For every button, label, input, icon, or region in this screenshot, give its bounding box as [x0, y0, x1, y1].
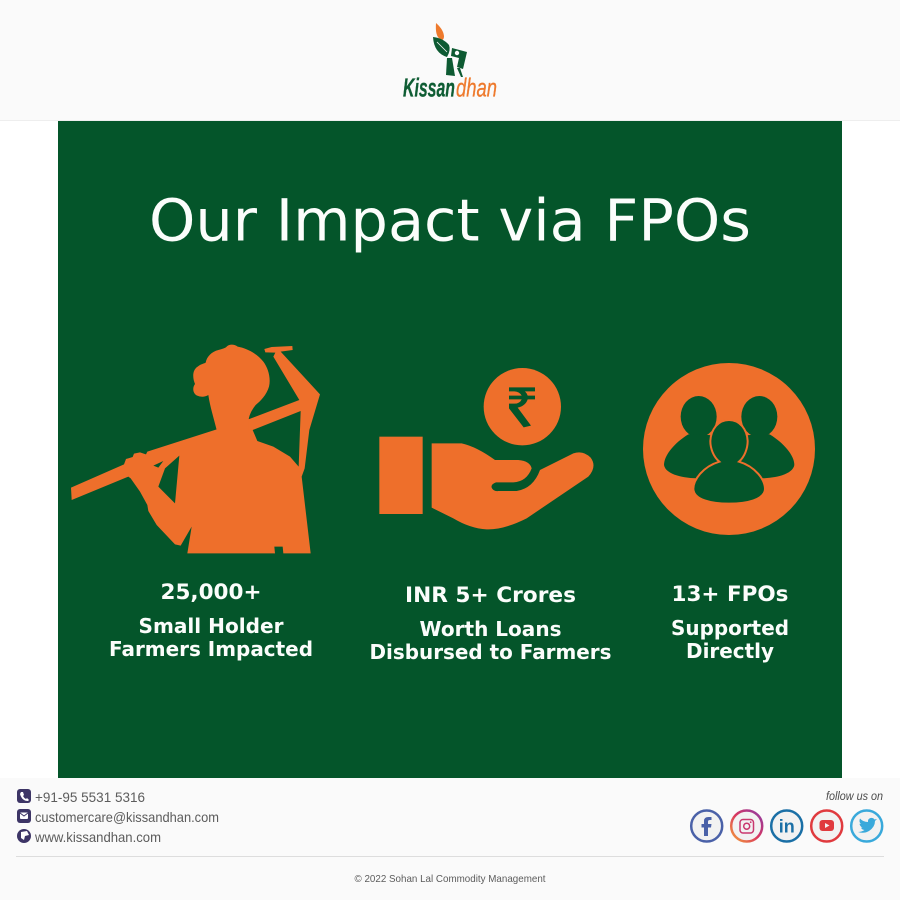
- social icons: [691, 810, 882, 842]
- person front: [693, 420, 765, 504]
- hand: [432, 443, 594, 529]
- logo: Kissandhan: [403, 23, 497, 102]
- email address: customercare@kissandhan.com: [35, 809, 219, 825]
- circle: [643, 363, 815, 535]
- text: loans stat: [370, 583, 612, 664]
- text: farmers stat: Small Holder: [138, 614, 284, 638]
- icon: farmer with pickaxe: [71, 345, 320, 553]
- phone number: +91-95 5531 5316: [35, 789, 145, 805]
- website address: www.kissandhan.com: [34, 829, 161, 845]
- icon: people in circle: [643, 363, 815, 535]
- person left: [664, 396, 745, 478]
- icon: envelope: [17, 809, 31, 823]
- text: FPO stat: Directly: [686, 639, 774, 663]
- wordmark: dhan: dhan: [456, 72, 497, 102]
- person right: [715, 396, 794, 478]
- icon: stem: [446, 58, 455, 76]
- follow us label: follow us on: [826, 791, 883, 803]
- rupee symbol: [509, 387, 535, 427]
- icon: figure panel: [451, 48, 467, 69]
- cuff: [379, 437, 423, 514]
- head: [193, 345, 270, 430]
- text: loans stat: Disbursed to Farmers: [370, 640, 612, 664]
- coin: [484, 368, 561, 445]
- footer band: [0, 778, 900, 900]
- contact: website: [17, 829, 161, 845]
- text: farmers stat: 25,000+: [160, 580, 262, 605]
- icon: twitter: [851, 810, 882, 842]
- icon: tail: [457, 68, 463, 77]
- icon: flame: [436, 23, 444, 40]
- contact: phone: [17, 789, 145, 805]
- text: loans stat: Worth Loans: [420, 617, 562, 641]
- text: loans stat: INR 5+ Crores: [405, 583, 576, 608]
- title: Our Impact via FPOs: [149, 186, 751, 254]
- icon: instagram: [731, 810, 762, 842]
- icon: hand with rupee coin: [379, 368, 594, 529]
- text: FPO stat: Supported: [671, 616, 789, 640]
- icon: leaf: [433, 37, 450, 57]
- icon: facebook: [691, 810, 722, 842]
- footer divider: [16, 856, 884, 857]
- text: farmers stat: [109, 580, 313, 661]
- wordmark: Kissan: Kissan: [403, 72, 455, 102]
- icon: linkedin: [771, 810, 802, 842]
- text: FPO stat: [671, 582, 789, 663]
- icon: figure head: [455, 51, 459, 55]
- icon: linkedin: in: [779, 816, 795, 836]
- panel: impact: [58, 121, 842, 778]
- header band: [0, 0, 900, 121]
- contact: email: [17, 809, 219, 825]
- icon: leaf vein: [437, 42, 447, 52]
- copyright: © 2022 Sohan Lal Commodity Management: [354, 873, 546, 885]
- icon: globe: [17, 829, 31, 843]
- body and tool: [71, 346, 320, 553]
- text: FPO stat: 13+ FPOs: [672, 582, 788, 607]
- icon: phone: [17, 789, 31, 803]
- text: farmers stat: Farmers Impacted: [109, 637, 313, 661]
- icon: youtube: [811, 810, 842, 842]
